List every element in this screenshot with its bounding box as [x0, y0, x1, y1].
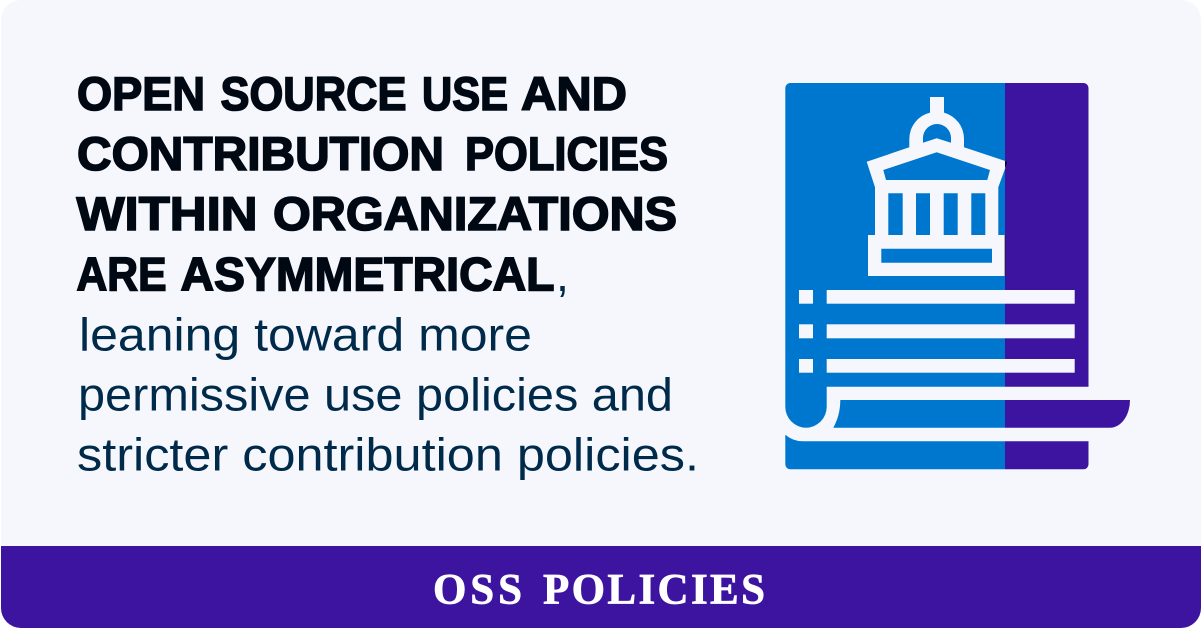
- heading: bold statement: ORGANIZATIONS: [273, 187, 677, 240]
- heading: bold statement: ASYMMETRICAL: [180, 248, 554, 300]
- icon: government building: [867, 97, 1005, 276]
- heading: bold statement: [76, 67, 677, 300]
- heading: bold statement: AND: [521, 67, 627, 120]
- footer band: [1, 546, 1201, 628]
- text: explanatory sentence: leaning toward more: [79, 309, 532, 361]
- heading: bold statement: USE: [422, 67, 508, 120]
- document: purple part: [1005, 83, 1130, 469]
- text: explanatory sentence: ,: [556, 249, 569, 301]
- document: blue part: [785, 83, 1005, 469]
- list lines: bullets and text bars: [799, 290, 1075, 373]
- text: explanatory sentence: [77, 249, 699, 480]
- footer label: [433, 566, 765, 613]
- icon: policy document with government building: [785, 83, 1130, 469]
- heading: bold statement: WITHIN: [76, 187, 258, 240]
- text: explanatory sentence: stricter contribution policies.: [77, 428, 699, 480]
- heading: bold statement: CONTRIBUTION: [77, 127, 444, 180]
- text block: headline statement: [76, 67, 699, 480]
- footer label: OSS: [433, 566, 522, 613]
- heading: bold statement: SOURCE: [220, 67, 406, 120]
- heading: bold statement: POLICIES: [465, 127, 668, 180]
- text: explanatory sentence: permissive use policies and: [78, 369, 673, 421]
- heading: bold statement: ARE: [76, 248, 166, 300]
- heading: bold statement: OPEN: [77, 67, 205, 120]
- footer label: POLICIES: [543, 566, 765, 613]
